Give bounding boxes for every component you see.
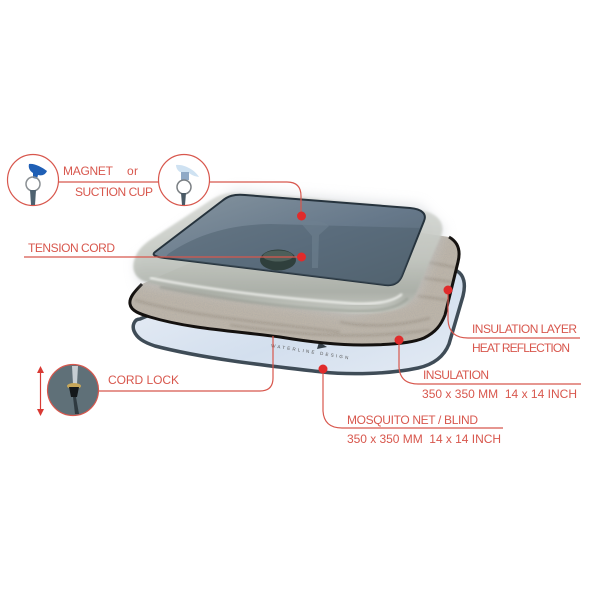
insulation layer [128, 236, 461, 346]
label: magnet or suction cup: SUCTION CUP [75, 185, 153, 199]
label: insulation layer: HEAT REFLECTION [472, 341, 570, 355]
hatch frame [133, 193, 442, 314]
label: magnet or suction cup: MAGNET [63, 164, 114, 178]
label: insulation: 350 x 350 MM 14 x 14 INCH [422, 387, 577, 401]
icon: magnet [8, 154, 58, 206]
arrow: up and down [37, 366, 44, 416]
label: magnet or suction cup: or [127, 164, 138, 178]
icon: cord lock [48, 364, 98, 416]
label: mosquito net: 350 x 350 MM 14 x 14 INCH [347, 432, 501, 446]
label: cord lock: CORD LOCK [108, 373, 179, 387]
label: mosquito net [318, 364, 503, 446]
label: tension cord [24, 241, 306, 262]
label: insulation: INSULATION [423, 368, 489, 382]
frame shadow [135, 190, 445, 316]
label: tension cord: TENSION CORD [28, 241, 115, 255]
cord knob [260, 250, 296, 270]
icon: suction cup [158, 154, 210, 206]
label: insulation layer: INSULATION LAYER [472, 322, 577, 336]
label: cord lock [98, 336, 273, 391]
blind logo: WATERLINE DESIGN [271, 343, 349, 360]
glass pane [154, 195, 425, 285]
label: insulation layer [444, 286, 580, 355]
blind layer [133, 250, 464, 374]
label: magnet or suction cup [58, 164, 306, 220]
label: mosquito net: MOSQUITO NET / BLIND [347, 413, 478, 427]
label: insulation [394, 336, 581, 401]
